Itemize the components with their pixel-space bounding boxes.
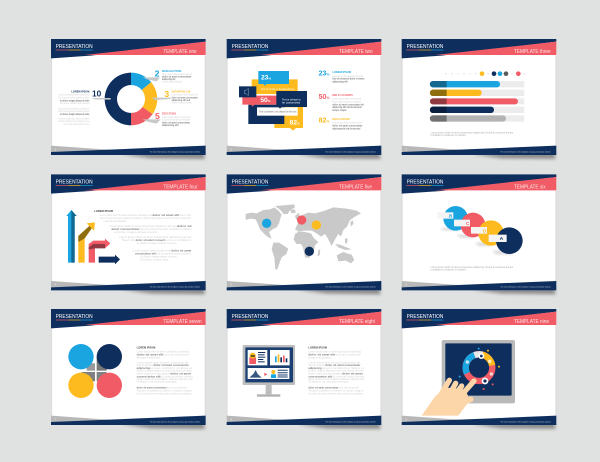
slide title: PRESENTATION bbox=[407, 314, 443, 320]
body text: Lorem ipsum dolor sit amet consectetur adipiscing bbox=[137, 350, 190, 353]
stat: 50%: RED ST ACADEMY bbox=[332, 94, 353, 97]
callout: 3: INCUBATION LAB bbox=[172, 91, 191, 94]
callout: 5: adipiscing elit bbox=[162, 124, 179, 127]
speech bubble diagram: 50% bbox=[260, 97, 271, 104]
body text: dolor sit amet elit bbox=[137, 353, 164, 356]
body text: Lorem ipsum dolor sit amet elit bbox=[133, 250, 171, 253]
stat: 82%: EDUCATION bbox=[332, 118, 350, 121]
body text: dolor sit amet bbox=[342, 373, 363, 376]
body text: dolor sit amet bbox=[171, 250, 192, 253]
body text: dolor sit amet consect bbox=[136, 239, 165, 242]
panel: template seven bbox=[51, 309, 206, 429]
body text: Quis nostrud exercitation ullamco laboris nisi bbox=[137, 378, 193, 381]
body text: Ut enim ad minim veniam quis nostrud exercitation bbox=[137, 392, 192, 395]
step A: A bbox=[500, 236, 504, 242]
stat: 23% bbox=[319, 71, 365, 83]
footer note: For more information on this template visit your presentation website bbox=[150, 420, 200, 423]
stat: 82%: Lorem ipsum dolor sit amet elit sed bbox=[332, 122, 363, 125]
body text: Quis nostrud exercitation bbox=[308, 373, 343, 376]
body text: Quis nostrud exercitation bbox=[137, 373, 171, 376]
footer note: For more information on this template visit your presentation website bbox=[501, 286, 551, 289]
panel: template one bbox=[51, 39, 206, 159]
body text: Sed do eiusmod tempor incididunt ut labore et dolore magna aliqua ut enim ad minim veniam quis bbox=[100, 217, 191, 220]
body text: consectetur elit bbox=[137, 375, 161, 378]
body text: Quis nostrud exercitation ullamco laboris nisi bbox=[308, 378, 365, 381]
body text: Dolore magna aliqua ut enim ad minim veniam bbox=[308, 370, 363, 373]
page number: 1 bbox=[55, 147, 57, 151]
stat: 82%: dolor sit amet consectetur bbox=[332, 125, 362, 128]
body text: et dolore magna aliqua ut enim bbox=[137, 242, 177, 245]
callout: 2: Sed do eiusmod tempor bbox=[162, 81, 182, 84]
callout: 10: 10 bbox=[92, 88, 102, 98]
callout: 5: 5 bbox=[155, 111, 160, 121]
stat: 50%: 50% bbox=[319, 94, 329, 101]
body text: Dolore magna aliqua ut enim ad minim veniam bbox=[137, 370, 192, 373]
arrow: yellow bent bbox=[78, 222, 95, 263]
body text: dolor sit amet consectetur bbox=[154, 364, 189, 367]
caption: Lorem ipsum dolor sit amet consectetur adipiscing elit sed do eiusmod tempor bbox=[431, 266, 514, 269]
arrow: red bent bbox=[89, 239, 110, 263]
body text: Lorem ipsum dolor sit amet consectetur adipiscing elit bbox=[99, 214, 152, 217]
callout: 3: adipiscing elit sed bbox=[172, 99, 191, 102]
body text: Ut enim ad minim veniam bbox=[161, 375, 193, 378]
body text: Lorem ipsum dolor sit amet consectetur adipiscing bbox=[308, 350, 362, 353]
panel: template three bbox=[402, 39, 556, 159]
body text: Ut enim ad minim veniam quis nostrud exercitation bbox=[308, 392, 364, 395]
template label: TEMPLATE six bbox=[514, 184, 546, 190]
panel: template five bbox=[227, 174, 381, 294]
footer note: For more information on this template visit your presentation website bbox=[150, 286, 200, 289]
four petal diagram bbox=[68, 344, 122, 398]
callout: 2: 2 bbox=[155, 68, 160, 78]
slide title: PRESENTATION bbox=[56, 179, 93, 185]
icon: desktop monitor bbox=[243, 345, 295, 397]
body text: LOREM IPSUM bbox=[308, 348, 327, 350]
slide title: PRESENTATION bbox=[407, 179, 443, 185]
callout: 2: dolor sit amet consectetur bbox=[162, 76, 191, 79]
callout: 3: dolor sit amet consectetur bbox=[172, 96, 198, 99]
body text: Sed do eiusmod tempor incididunt bbox=[156, 253, 191, 256]
step C bbox=[454, 213, 485, 237]
callout: 3: 3 bbox=[164, 89, 169, 99]
callout: 3: Sed do eiusmod tempor bbox=[172, 102, 192, 105]
body text: Sed do eiusmod tempor incididunt ut labore bbox=[140, 228, 192, 231]
body text: dolor sit bbox=[177, 225, 192, 228]
callout: 5: EDUCATION bbox=[162, 113, 176, 116]
step D: D bbox=[483, 228, 487, 233]
body text: tempor incididunt bbox=[308, 356, 332, 359]
callout: 3 bbox=[164, 89, 198, 105]
template label: TEMPLATE eight bbox=[339, 319, 375, 325]
body text bbox=[94, 211, 192, 261]
body text bbox=[308, 348, 365, 395]
marker: blue bbox=[262, 219, 271, 228]
stat: 50%: adipiscing elit sed do eiusmod bbox=[332, 106, 362, 109]
template label: TEMPLATE seven bbox=[163, 319, 202, 325]
body text: sed do eiusmod bbox=[167, 387, 188, 389]
page number: 4 bbox=[55, 283, 57, 287]
speech bubble diagram: Text or phrase to be placed here bbox=[261, 88, 295, 91]
body text: dolor sit amet consectetur bbox=[308, 386, 338, 389]
stat: 23%: Sed do eiusmod dolor sit amet bbox=[332, 78, 365, 81]
callout: 10: Commodo consequat duis aute bbox=[63, 123, 90, 126]
body text: dolor sit amet consectetur bbox=[325, 364, 360, 367]
page number: 7 bbox=[55, 417, 57, 421]
footer note: For more information on this template visit your presentation website bbox=[150, 150, 200, 153]
body text: nostrud exercitation bbox=[103, 220, 127, 223]
callout: 5: Sed do eiusmod tempor incididunt bbox=[162, 119, 190, 122]
panel: template six bbox=[402, 174, 556, 294]
caption: incididunt ut labore et dolore bbox=[431, 134, 467, 137]
panel: template eight bbox=[227, 309, 381, 429]
footer note: For more information on this template visit your presentation website bbox=[326, 286, 376, 289]
body text: adipiscing bbox=[308, 368, 322, 370]
template label: TEMPLATE three bbox=[514, 49, 551, 55]
body text: tempor incididunt ut labore et bbox=[150, 367, 192, 370]
page number: 6 bbox=[405, 283, 407, 287]
footer note: For more information on this template visit your presentation website bbox=[326, 420, 376, 423]
slide title: PRESENTATION bbox=[232, 314, 268, 320]
callout: 5: dolor sit amet consectetur bbox=[162, 121, 190, 124]
body text: dolor sit amet consectetur bbox=[137, 386, 167, 389]
confetti dots bbox=[459, 348, 500, 390]
callout: 2: MAIN ELECTRON bbox=[162, 70, 182, 73]
icon: pointing hand bbox=[422, 380, 474, 416]
callout: 2: Lorem ipsum dolor sit amet elit sed bbox=[162, 73, 192, 76]
speech bubble diagram: Text or phrase to be placed in this box bbox=[259, 110, 297, 113]
speech bubble diagram: 23% bbox=[261, 75, 271, 82]
footer note: For more information on this template visit your presentation website bbox=[501, 420, 551, 423]
arrow: blue up bbox=[66, 210, 77, 263]
body text: Ut aliquip ex ea commodo consequat bbox=[308, 381, 349, 384]
marker: red bbox=[297, 215, 306, 225]
body text: Sed do eiusmod bbox=[308, 365, 326, 367]
speech bubble diagram: Text or phrase to bbox=[282, 98, 301, 101]
body text: sed do eiusmod bbox=[339, 387, 360, 389]
template label: TEMPLATE one bbox=[163, 49, 197, 55]
body text: Tempor incididunt ut labore et dolore magna bbox=[137, 389, 193, 392]
body text: Lorem ipsum dolor sit amet consectetur elit bbox=[137, 361, 189, 364]
body text: dolor sit amet elit bbox=[308, 353, 335, 356]
caption bbox=[431, 266, 514, 272]
body text: dolor sit amet bbox=[170, 373, 191, 376]
stat: 50%: dolor sit amet consectetur elit bbox=[332, 103, 364, 106]
tablet bbox=[442, 340, 515, 403]
horizontal bar chart bbox=[430, 81, 524, 122]
footer note: For more information on this template visit your presentation website bbox=[326, 150, 376, 153]
donut chart bbox=[92, 73, 171, 125]
body text: adipiscing bbox=[137, 368, 151, 370]
arrow: navy right bbox=[99, 255, 120, 264]
caption: Lorem ipsum dolor sit amet consectetur adipiscing elit sed do eiusmod tempor bbox=[431, 131, 514, 134]
body text: sed do eiusmod bbox=[335, 354, 361, 356]
template label: TEMPLATE two bbox=[339, 49, 373, 55]
stat: 82%: adipiscing elit sed do eiusmod bbox=[332, 127, 361, 130]
dot scale bbox=[445, 71, 525, 76]
stat: 23%: 23% bbox=[319, 71, 329, 78]
footer note: For more information on this template visit your presentation website bbox=[501, 150, 551, 153]
stat: 50%: tempor magna bbox=[332, 109, 347, 112]
callout: 10: Ad minim veniam quis nostrud exercitation bbox=[58, 117, 90, 120]
callout: 10: Sed do eiusmod tempor incididunt ut labore bbox=[58, 96, 90, 99]
stat: 50% bbox=[319, 94, 364, 112]
stat: 82%: 82% bbox=[319, 118, 329, 125]
slide title: PRESENTATION bbox=[56, 314, 93, 320]
panel: template four bbox=[51, 174, 206, 294]
stat: 23%: Lorem ipsum dolor sit amet elit sed do bbox=[332, 75, 364, 78]
marker: navy bbox=[305, 247, 314, 256]
body text: tempor incididunt bbox=[137, 356, 160, 359]
body text: Sed do eiusmod bbox=[137, 365, 154, 367]
caption bbox=[431, 131, 514, 137]
body text: consectetur elit bbox=[135, 253, 156, 256]
marker: yellow bbox=[312, 220, 321, 230]
callout: 10 bbox=[58, 88, 102, 126]
stat: 82% bbox=[319, 118, 363, 130]
callout: 10: Sed do eiusmod tempor incididunt ut labore bbox=[58, 110, 90, 113]
callout: 10: Lorem ipsum dolor sit amet consectetur elit bbox=[58, 107, 90, 110]
callout: 5 bbox=[155, 111, 190, 127]
body text: Lorem ipsum dolor sit amet consectetur adipiscing elit sed bbox=[109, 225, 177, 228]
body text: Ad minim veniam quis bbox=[140, 258, 169, 261]
stat: 50%: Sed do eiusmod tempor incididunt bbox=[332, 100, 361, 103]
slide title: PRESENTATION bbox=[407, 44, 443, 50]
callout: 2 bbox=[155, 68, 192, 84]
body text: LOREM IPSUM bbox=[94, 211, 113, 213]
panel: template two bbox=[227, 39, 381, 159]
slide title: PRESENTATION bbox=[232, 179, 268, 185]
body text: Tempor incididunt ut labore et dolore magna bbox=[308, 389, 364, 392]
slide title: PRESENTATION bbox=[56, 44, 93, 50]
stat: 23%: LOREM IPSUM bbox=[332, 72, 351, 74]
circle shadows bbox=[440, 228, 513, 255]
speech bubble diagram: be customized bbox=[282, 101, 301, 104]
body text: Ut enim ad minim veniam bbox=[333, 375, 364, 378]
body text: tempor incididunt bbox=[165, 239, 192, 242]
caption: incididunt ut labore et dolore bbox=[431, 269, 467, 272]
speech bubble diagram bbox=[239, 71, 307, 131]
callout: 5: Lorem ipsum dolor sit amet elit bbox=[162, 116, 190, 119]
body text: Lorem ipsum dolor sit amet consectetur adipiscing elit sed bbox=[119, 236, 192, 239]
step C: C bbox=[466, 221, 470, 226]
callout: 10: Ad minim veniam quis nostrud bbox=[60, 102, 90, 105]
body text: Sed do bbox=[122, 240, 137, 242]
page number: 8 bbox=[230, 417, 232, 421]
world map bbox=[246, 204, 361, 269]
template label: TEMPLATE nine bbox=[514, 319, 549, 325]
body text: sed do eiusmod bbox=[164, 354, 190, 356]
callout: 2: adipiscing elit bbox=[162, 78, 176, 81]
body text: sed do bbox=[179, 215, 192, 217]
step D bbox=[471, 220, 504, 246]
page number: 3 bbox=[405, 147, 407, 151]
body text bbox=[137, 348, 193, 395]
speech bubble diagram: 82% bbox=[290, 120, 300, 127]
callout: 10: et dolore magna aliqua ut enim bbox=[60, 113, 89, 116]
step B bbox=[437, 206, 468, 231]
body text: LOREM IPSUM bbox=[137, 348, 155, 350]
stat: 50%: Lorem ipsum dolor sit amet elit bbox=[332, 98, 361, 101]
step A bbox=[489, 227, 523, 254]
body text: et dolore magna aliqua ut enim bbox=[114, 231, 157, 234]
step B: B bbox=[449, 213, 453, 218]
page number: 2 bbox=[230, 147, 232, 151]
callout: 10: LOREM IPSUM bbox=[71, 91, 89, 93]
ring diagram bbox=[461, 350, 497, 385]
body text: Et dolore magna aliqua ut enim bbox=[140, 256, 177, 259]
body text: dolor sit amet elit bbox=[152, 214, 179, 217]
body text: Ut aliquip ex ea commodo consequat bbox=[137, 381, 177, 384]
page number: 5 bbox=[230, 283, 232, 287]
panel: template nine bbox=[402, 309, 556, 429]
body text: tempor incididunt ut labore et bbox=[322, 367, 364, 370]
page number: 9 bbox=[405, 417, 407, 421]
template label: TEMPLATE four bbox=[163, 184, 198, 190]
callout: 3: Lorem ipsum dolor sit amet elit bbox=[172, 94, 198, 97]
callout: 10: Lorem ipsum dolor sit amet consectetur elit bbox=[58, 94, 90, 97]
slide title: PRESENTATION bbox=[232, 44, 268, 50]
body text: amet consectetur bbox=[111, 228, 140, 231]
stat: 23%: adipiscing elit bbox=[332, 80, 348, 83]
template label: TEMPLATE five bbox=[339, 184, 372, 190]
callout: 10: et dolore magna aliqua ut enim bbox=[60, 99, 89, 102]
callout: 10: Ullamco laboris nisi ut aliquip ex ea bbox=[58, 120, 90, 123]
body text: Lorem ipsum dolor sit amet consectetur elit bbox=[308, 361, 360, 364]
body text: consectetur elit bbox=[308, 375, 333, 378]
